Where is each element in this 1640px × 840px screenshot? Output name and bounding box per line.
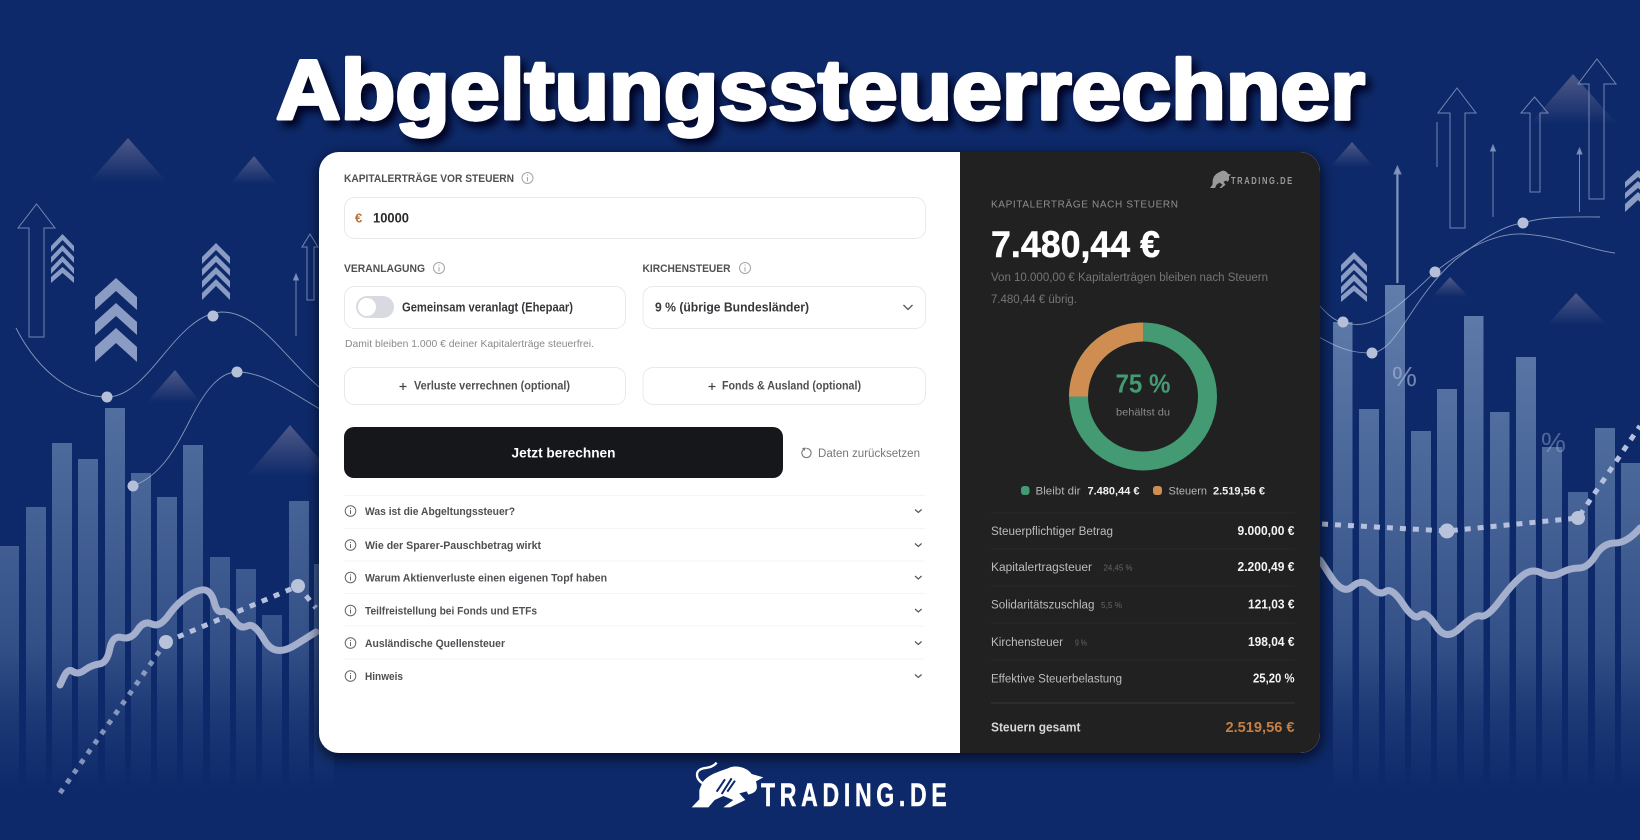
- breakdown table: Steuern gesamt: [991, 720, 1081, 734]
- thick trend lines: [60, 528, 1640, 685]
- field: Kapitalerträge: [344, 172, 926, 238]
- breakdown table: 5,5 %: [1101, 600, 1122, 610]
- field: Kapitalerträge: €: [355, 210, 362, 226]
- accordion list: Teilfreistellung bei Fonds und ETFs: [365, 606, 537, 618]
- button: Jetzt berechnen: [344, 427, 783, 478]
- donut chart: behältst du: [1116, 406, 1170, 418]
- accordion list: Wie der Sparer-Pauschbetrag wirkt: [365, 540, 541, 552]
- field: Kapitalerträge: KAPITALERTRÄGE VOR STEUERN: [344, 172, 514, 185]
- breakdown table: 121,03 €: [1248, 598, 1295, 612]
- wordmark: TRADING.DE: [761, 777, 947, 813]
- field: Veranlagung: Gemeinsam veranlagt (Ehepaar): [402, 300, 573, 314]
- bar chart: right background: [1333, 285, 1640, 795]
- breakdown table: Kapitalertragsteuer: [991, 562, 1092, 574]
- breakdown table: 24,45 %: [1104, 562, 1133, 572]
- field: Veranlagung: Damit bleiben 1.000 € deiner Kapitalerträge steuerfrei.: [345, 338, 594, 350]
- icons: chevron stacks: [51, 170, 1640, 362]
- small logo: TRADING.DE: [1231, 175, 1292, 186]
- result description: [991, 272, 1268, 306]
- donut chart: 75 %: [1116, 368, 1170, 398]
- field: Kirchensteuer: 9 % (übrige Bundesländer): [655, 300, 809, 314]
- breakdown table: 9.000,00 €: [1238, 524, 1295, 538]
- breakdown table: Kirchensteuer: [991, 637, 1063, 649]
- icon: bull: [692, 763, 763, 807]
- accordion list: Ausländische Quellensteuer: [365, 638, 506, 650]
- legend: Steuern: [1168, 486, 1207, 498]
- accordion list: Hinweis: [365, 671, 403, 683]
- donut chart: [1078, 332, 1208, 461]
- panel: calculator card: [319, 152, 1320, 753]
- button: Verluste verrechnen: Verluste verrechnen (optional): [414, 380, 570, 392]
- thin trend lines with dots: [16, 217, 1615, 486]
- result amount: 7.480,44 €: [991, 224, 1160, 265]
- field: Veranlagung: VERANLAGUNG: [344, 263, 425, 275]
- breakdown table: 25,20 %: [1253, 672, 1294, 686]
- legend: 2.519,56 €: [1213, 486, 1265, 498]
- breakdown table: Steuerpflichtiger Betrag: [991, 526, 1113, 538]
- button: Jetzt berechnen: Jetzt berechnen: [512, 446, 616, 460]
- title: Abgeltungssteuerrechner: [276, 43, 1365, 137]
- field: Kapitalerträge: 10000: [373, 210, 409, 226]
- icons: outline arrows: [18, 59, 1616, 337]
- button: Fonds und Ausland: [643, 368, 926, 404]
- panel: results: [960, 152, 1320, 753]
- breakdown table: [991, 513, 1295, 736]
- field: Veranlagung: [344, 262, 626, 350]
- accordion list: Warum Aktienverluste einen eigenen Topf haben: [365, 572, 607, 584]
- breakdown table: 2.200,49 €: [1238, 560, 1295, 574]
- accordion list: Was ist die Abgeltungssteuer?: [365, 506, 515, 518]
- button: Fonds und Ausland: Fonds & Ausland (optional): [722, 380, 861, 392]
- legend: 7.480,44 €: [1088, 486, 1140, 498]
- breakdown table: 9 %: [1075, 638, 1087, 648]
- percent signs: %: [1392, 361, 1417, 392]
- bar chart: left background: [0, 408, 334, 807]
- dotted trend lines: [60, 426, 1640, 793]
- field: Kirchensteuer: [642, 262, 926, 328]
- logo: TRADING.DE: [692, 763, 947, 813]
- percent signs: [1392, 361, 1566, 458]
- legend: Bleibt dir: [1036, 486, 1081, 498]
- result heading: KAPITALERTRÄGE NACH STEUERN: [991, 198, 1178, 210]
- breakdown table: 198,04 €: [1248, 635, 1295, 649]
- small logo: [1210, 171, 1292, 188]
- breakdown table: Solidaritätszuschlag: [991, 600, 1094, 612]
- button: Verluste verrechnen: [344, 368, 626, 404]
- accordion list: [344, 496, 925, 683]
- link: Daten zurücksetzen: Daten zurücksetzen: [818, 448, 920, 460]
- result description: 7.480,44 € übrig.: [991, 294, 1077, 306]
- card body: [319, 152, 1320, 753]
- panel: input form: [344, 172, 926, 683]
- percent signs: %: [1541, 427, 1566, 458]
- decorative triangles: [89, 74, 1618, 477]
- field: Kirchensteuer: KIRCHENSTEUER: [642, 263, 731, 275]
- breakdown table: Effektive Steuerbelastung: [991, 674, 1122, 686]
- legend: [1021, 486, 1265, 498]
- breakdown table: 2.519,56 €: [1226, 720, 1294, 736]
- result description: Von 10.000,00 € Kapitalerträgen bleiben nach Steuern: [991, 272, 1268, 284]
